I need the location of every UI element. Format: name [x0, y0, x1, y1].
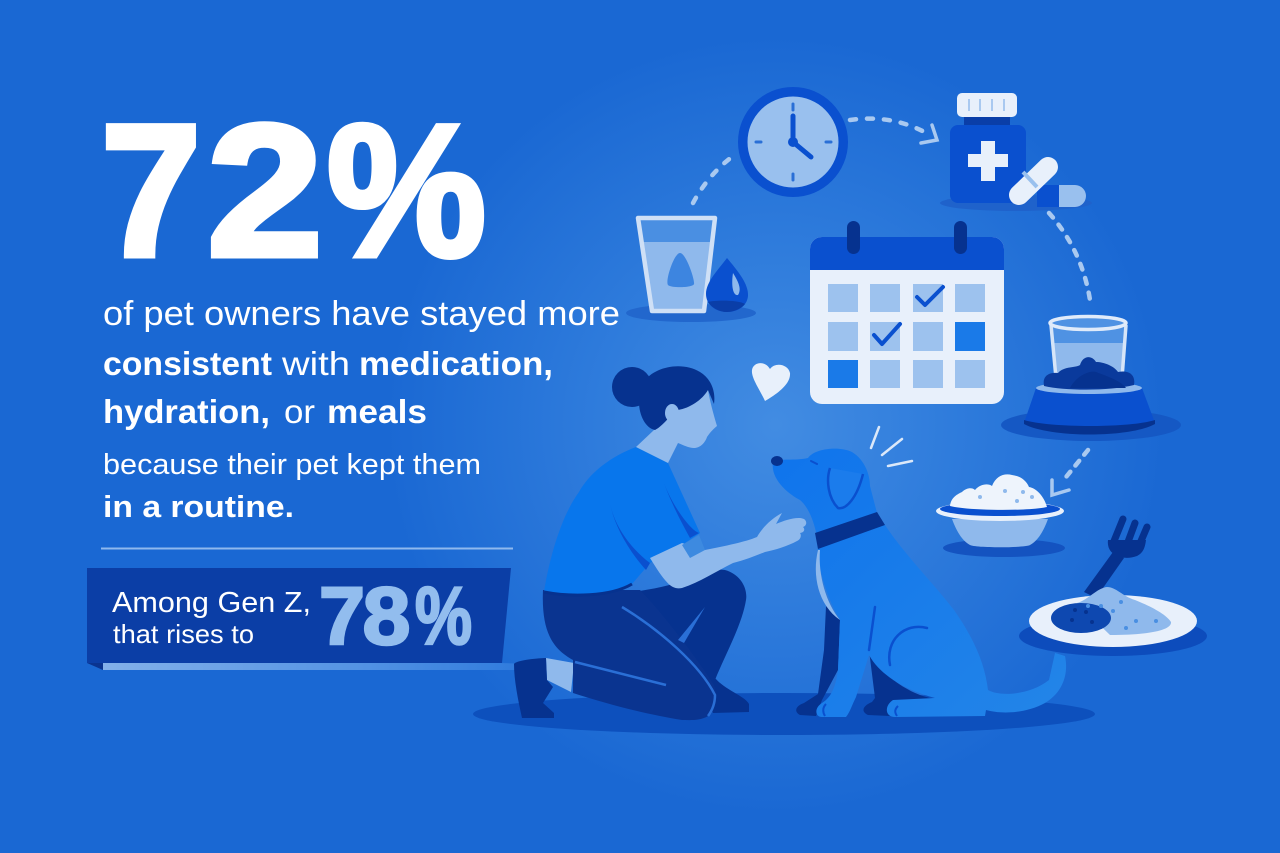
ear [828, 468, 863, 508]
body text block: with [281, 345, 350, 382]
illustration: dog [771, 449, 1066, 717]
headline statistic: 72% [101, 86, 486, 296]
body text block: meals [327, 393, 427, 430]
neck and face [636, 390, 717, 463]
back shoe [514, 658, 554, 718]
far front leg [796, 606, 840, 716]
far foot [700, 670, 749, 713]
chest highlight [816, 550, 840, 620]
body text block: hydration, [103, 393, 270, 430]
collar [815, 512, 885, 549]
body [773, 449, 1066, 717]
callout banner: Gen Z 78%: 7 [319, 571, 365, 662]
headline statistic: 72%: 7 [101, 86, 201, 296]
arm and hand [650, 513, 806, 588]
headline statistic: 72%: % [327, 86, 486, 296]
icon: food bowl with glass [1001, 316, 1181, 441]
sock [546, 658, 574, 692]
headline statistic: 72%: 2 [207, 86, 323, 296]
nose [771, 456, 783, 466]
body text block: or [284, 393, 315, 430]
icon: calendar [810, 221, 1004, 404]
eye [811, 461, 817, 464]
body text block: medication, [359, 345, 553, 382]
icon: bowl of rice [936, 474, 1065, 557]
body text block: in a routine. [103, 489, 294, 524]
icon: plate of food with fork [1019, 519, 1207, 656]
hind dark [863, 650, 935, 716]
ground shadow [473, 693, 1095, 735]
waist band [544, 584, 632, 595]
front leg [543, 590, 716, 720]
raised leg [625, 570, 746, 680]
icon: heart [752, 363, 790, 401]
callout banner: Gen Z 78%: Among Gen Z, [112, 587, 311, 619]
callout banner: Gen Z 78% [87, 568, 530, 670]
callout banner: Gen Z 78%: % [415, 571, 472, 662]
callout banner: Gen Z 78%: 8 [362, 571, 410, 662]
body text block: of pet owners have stayed more [103, 295, 620, 333]
body text block: because their pet kept them [103, 449, 481, 481]
icon: water glass with droplet [626, 218, 756, 322]
hind leg lines [869, 607, 927, 665]
hair [612, 367, 652, 407]
illustration: kneeling woman [514, 366, 806, 720]
toes [823, 704, 898, 716]
shirt [544, 447, 700, 595]
body text block: consistent [103, 345, 272, 382]
callout banner: Gen Z 78%: that rises to [113, 619, 254, 649]
dashed arrows cycle [693, 119, 1090, 495]
icon: clock [738, 87, 848, 197]
body text block [103, 295, 620, 524]
icon: medicine bottle and pills [940, 93, 1092, 211]
excitement lines [871, 427, 912, 466]
